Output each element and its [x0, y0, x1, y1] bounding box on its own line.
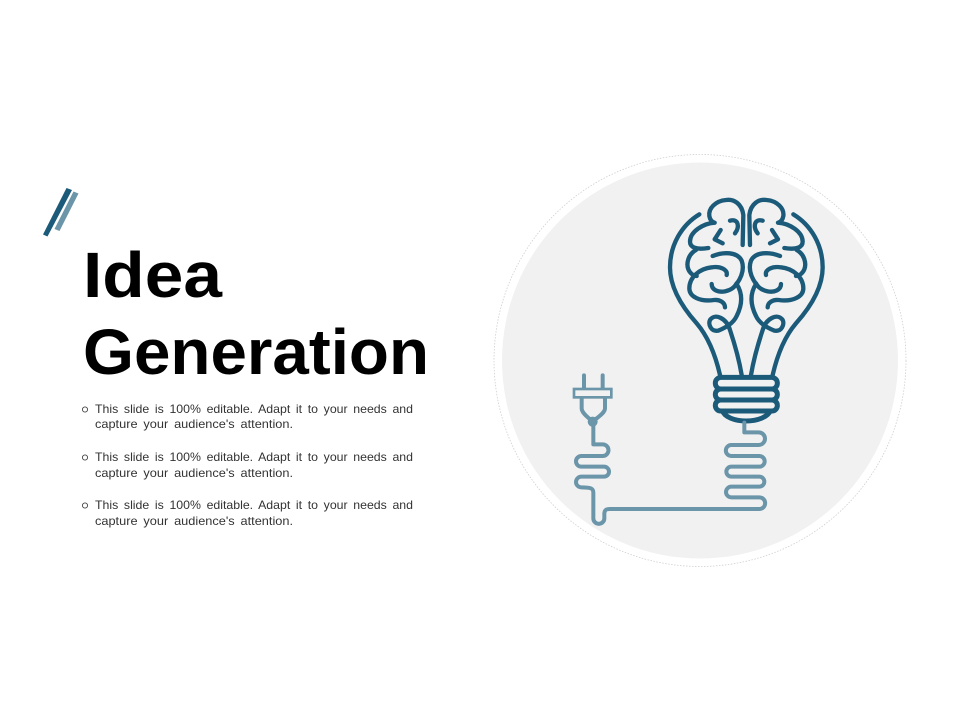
- bullet 3: This slide is 100% editable. Adapt it to your needs and: [95, 498, 413, 512]
- bullet 3: capture your audience's attention.: [95, 514, 293, 528]
- plug: [574, 375, 611, 427]
- right half: [749, 200, 823, 375]
- title: Generation: [83, 316, 429, 388]
- bullet 1: This slide is 100% editable. Adapt it to your needs and: [95, 402, 413, 416]
- icon: brain light bulb: [670, 200, 823, 375]
- icon: cord and plug: [574, 375, 765, 524]
- title: Idea: [83, 239, 222, 311]
- circle backdrop: [494, 154, 906, 566]
- cord: [576, 423, 765, 524]
- title: [83, 239, 429, 388]
- bullet 2: [82, 450, 413, 480]
- accent slashes: [43, 188, 78, 236]
- bullet 1: capture your audience's attention.: [95, 417, 293, 431]
- bullet 3: [82, 498, 413, 528]
- icon: bulb base: [715, 377, 777, 421]
- bullet 1: [82, 402, 413, 431]
- bullet list: [82, 402, 413, 528]
- left half: [670, 200, 743, 375]
- bullet 2: capture your audience's attention.: [95, 466, 293, 480]
- bullet 2: This slide is 100% editable. Adapt it to your needs and: [95, 450, 413, 464]
